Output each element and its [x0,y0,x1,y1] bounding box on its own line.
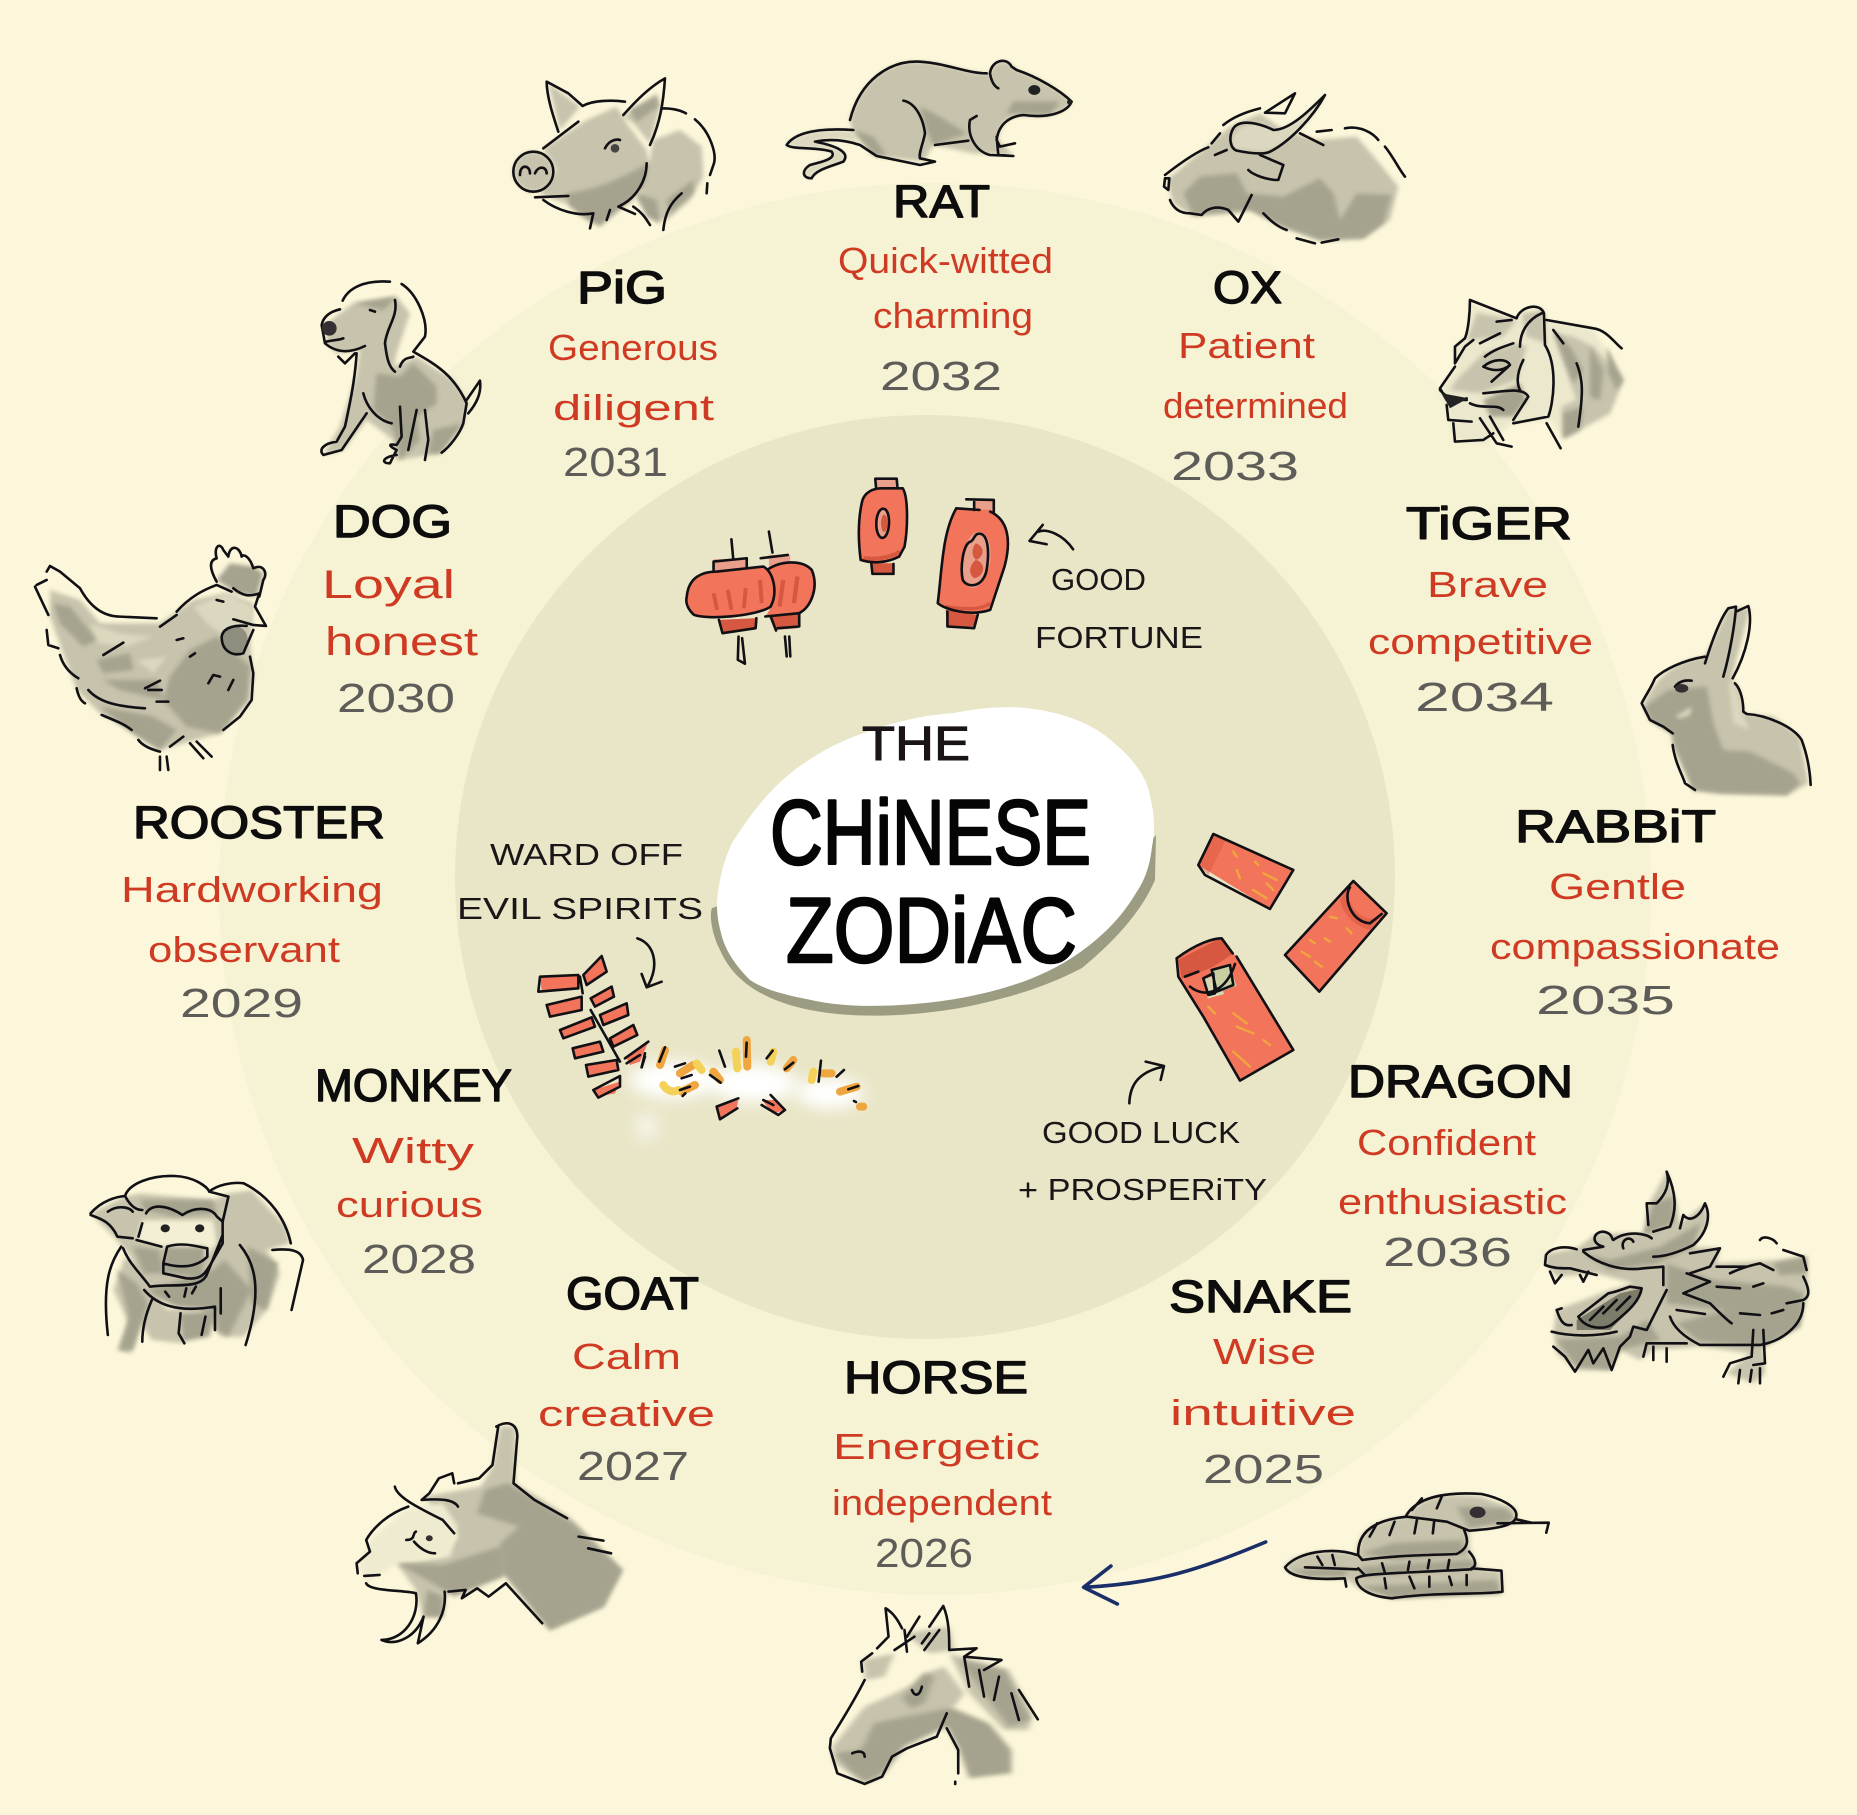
label: good fortune [1035,562,1203,655]
trait 1: Confident [1357,1122,1536,1163]
icon: snake [1285,1493,1549,1598]
explosion glow [630,1062,863,1140]
flying pieces [717,1095,785,1119]
inner circle background [455,415,1395,1339]
trait 2: competitive [1368,621,1593,662]
round lantern back [761,532,815,656]
title blob [711,707,1156,1016]
name: MONKEY [315,1060,512,1111]
envelope 1 [1198,834,1293,909]
icon: rabbit [1642,606,1811,795]
title: THE: THE [862,718,970,771]
trait 1: Hardworking [121,869,383,910]
large cylinder lantern [938,499,1008,628]
year: 2026 [875,1530,973,1576]
red envelopes illustration [1129,834,1387,1103]
trait 2: charming [873,295,1033,336]
name: PiG [577,262,667,313]
icon: dragon [1545,1172,1808,1383]
trait 2: independent [832,1482,1052,1523]
envelope 2 [1285,881,1387,992]
trait 2: diligent [553,387,714,428]
trait 2: curious [336,1184,483,1225]
name: TiGER [1406,498,1572,549]
panel: dragon [1338,1056,1573,1275]
name: OX [1213,262,1282,313]
round lantern front [686,539,774,664]
panel: monkey [315,1060,512,1282]
year: 2034 [1415,674,1554,720]
firecrackers illustration [538,938,863,1140]
trait 2: determined [1163,385,1348,426]
trait 1: Gentle [1549,866,1686,907]
FORTUNE: FORTUNE [1035,620,1203,655]
year: 2029 [180,980,303,1026]
+ PROSPERITY: + PROSPERiTY [1018,1172,1267,1207]
panel: rabbit [1490,801,1780,1023]
icon: ox [1164,93,1405,243]
year: 2031 [563,439,668,485]
icon: dog [321,281,480,463]
name: DRAGON [1348,1056,1573,1107]
arrow: to firecrackers [637,938,662,987]
icon: monkey [91,1176,303,1353]
GOOD LUCK: GOOD LUCK [1042,1115,1240,1150]
name: SNAKE [1169,1271,1352,1322]
panel: horse [832,1352,1052,1576]
year: 2033 [1171,443,1299,489]
name: HORSE [844,1352,1028,1403]
trait 1: Quick-witted [838,240,1053,281]
panel: rooster [121,797,385,1026]
icon: rat [787,61,1072,178]
cracker string [538,956,648,1098]
panel: pig [548,262,718,485]
trait 2: creative [538,1393,715,1434]
lanterns illustration [686,479,1008,664]
name: DOG [333,496,452,547]
panel: ox [1163,262,1348,489]
label: ward off evil spirits [457,837,703,926]
trait 1: Loyal [322,563,455,607]
trait 2: enthusiastic [1338,1181,1567,1222]
panel: rat [838,176,1053,399]
sparks [660,1040,863,1107]
panel: dog [322,496,478,721]
icon: horse [830,1606,1038,1784]
name: RABBiT [1515,801,1716,852]
year: 2027 [577,1443,689,1489]
trait 2: honest [325,620,478,664]
panel: tiger [1368,498,1593,720]
name: RAT [893,176,990,227]
trait 1: Generous [548,327,718,368]
trait 1: Energetic [833,1426,1040,1467]
outer ring background [219,183,1651,1595]
icon: tiger [1440,300,1623,448]
envelope 3 with money [1177,938,1293,1081]
panel: goat [538,1268,715,1489]
arrow: snake year to horse year [1084,1542,1266,1604]
year: 2025 [1203,1446,1324,1492]
icon: rooster [35,546,266,770]
year: 2035 [1536,977,1675,1023]
white blob [717,707,1154,1006]
title: CHINESE: CHiNESE [770,782,1091,884]
icon: goat [357,1423,623,1643]
year: 2036 [1383,1229,1512,1275]
WARD OFF: WARD OFF [490,837,683,872]
trait 1: Wise [1213,1331,1316,1372]
trait 1: Calm [572,1336,681,1377]
year: 2030 [337,675,455,721]
small cylinder lantern [859,479,907,574]
trait 1: Patient [1178,325,1315,366]
icon: pig [513,78,715,230]
blob shadow [711,835,1156,1016]
trait 2: observant [148,929,340,970]
arrow: to good fortune [1029,525,1073,549]
name: GOAT [566,1268,699,1319]
trait 2: compassionate [1490,926,1780,967]
title: ZODIAC: ZODiAC [786,880,1077,982]
label: good luck and prosperity [1018,1115,1267,1207]
EVIL SPIRITS: EVIL SPIRITS [457,891,703,926]
trait 2: intuitive [1170,1392,1356,1433]
GOOD: GOOD [1051,562,1146,597]
panel: snake [1169,1271,1356,1492]
year: 2032 [880,353,1002,399]
arrow: to envelopes [1129,1062,1164,1103]
trait 1: Witty [352,1130,474,1171]
name: ROOSTER [133,797,385,848]
trait 1: Brave [1427,564,1548,605]
year: 2028 [362,1236,476,1282]
